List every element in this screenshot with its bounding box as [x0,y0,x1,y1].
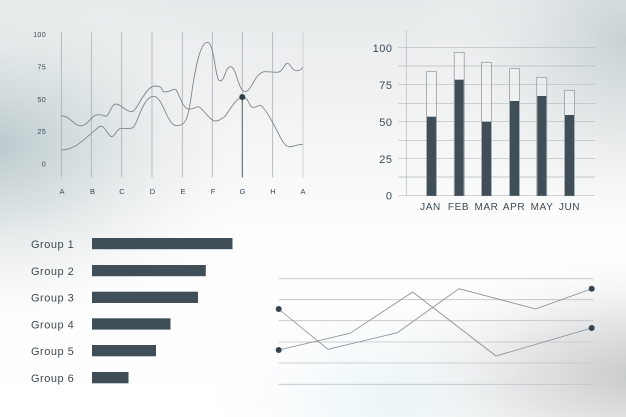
x axis labels: A [300,187,306,196]
group labels: Group 2 [31,266,74,278]
x axis labels: APR [503,202,525,213]
x axis labels: FEB [448,202,469,213]
y axis labels: 75 [379,80,392,92]
x axis labels: JAN [420,202,441,213]
group labels: Group 4 [31,320,74,332]
y axis labels [373,43,392,202]
dark bars [427,80,574,196]
end point markers [276,286,595,353]
y axis labels: 100 [33,30,46,39]
panel: straight line chart [276,279,595,384]
x axis labels: A [59,187,65,196]
y axis labels: 0 [386,190,392,202]
y axis labels [33,30,46,168]
group labels: Group 6 [31,373,74,385]
group labels: Group 3 [31,292,74,304]
x axis labels [59,187,306,196]
panel: horizontal bars [31,238,232,385]
group labels [31,239,74,385]
curves [61,42,303,150]
y axis labels: 75 [37,62,46,72]
y axis labels: 0 [42,160,46,168]
y axis labels: 100 [373,43,392,55]
x axis labels: D [150,187,156,196]
group labels: Group 1 [31,239,74,251]
x axis labels [420,202,580,213]
x axis labels: B [90,187,95,196]
x axis labels: F [211,187,216,196]
y axis labels: 25 [37,127,46,136]
x axis labels: G [240,187,246,196]
marker at G [239,94,245,178]
panel: smooth line chart [33,30,306,196]
x axis labels: JUN [559,202,580,213]
bars [92,238,232,383]
x axis labels: MAY [531,202,553,213]
y axis labels: 25 [379,154,392,166]
bar outlines [426,52,574,196]
lines [279,289,592,356]
panel: stacked bar chart [373,30,595,213]
x axis labels: H [270,187,276,196]
y axis labels: 50 [379,117,392,129]
group labels: Group 5 [31,346,74,358]
y axis labels: 50 [37,95,46,104]
x axis labels: C [119,187,125,196]
x axis labels: E [180,187,186,196]
x axis labels: MAR [474,202,499,213]
